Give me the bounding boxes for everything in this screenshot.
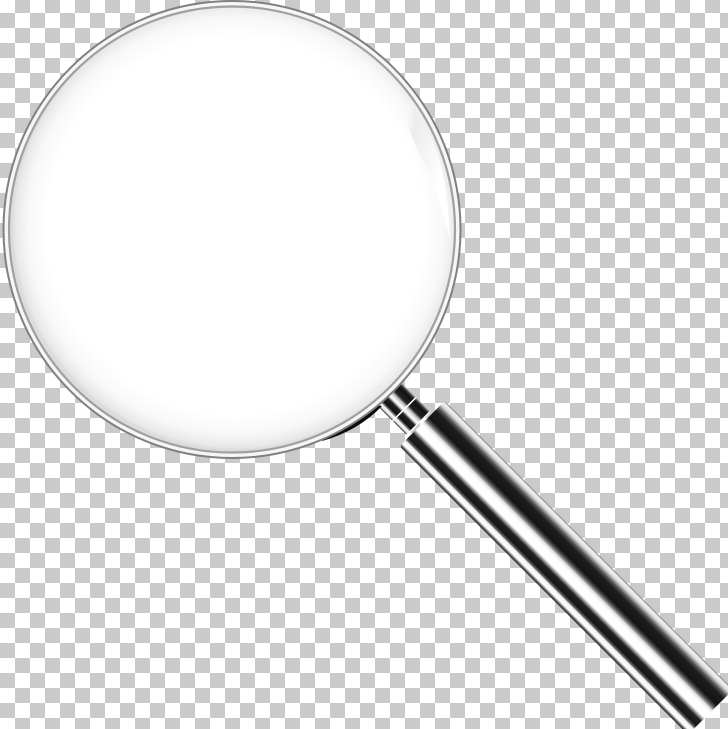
ferrule: lower collar <box>393 398 430 435</box>
lens shadow crescent <box>322 400 382 441</box>
handle shaft <box>400 401 728 729</box>
rim: inner ring <box>9 6 455 452</box>
ferrule: upper collar <box>375 380 416 421</box>
lens and rim <box>4 1 460 458</box>
rim: outer ring <box>4 1 460 458</box>
collar separators <box>392 397 431 436</box>
lens highlight <box>405 98 450 240</box>
handle <box>366 368 728 729</box>
